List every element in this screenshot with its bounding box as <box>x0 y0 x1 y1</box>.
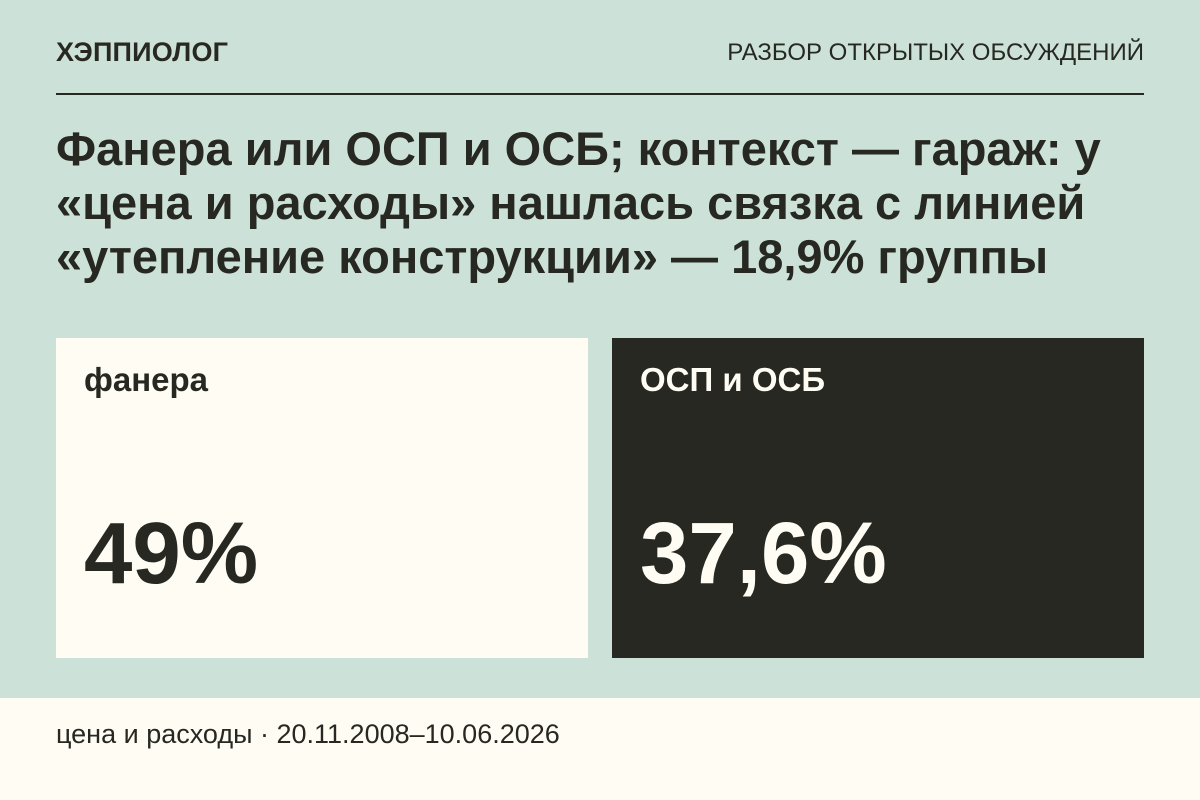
value: 37,6%: 37,6% <box>640 505 887 602</box>
title: Фанера или ОСП и ОСБ; контекст — гараж: у <box>56 122 1101 175</box>
panel label: фанера: фанера <box>84 361 208 398</box>
title <box>56 122 1101 283</box>
brand name: ХЭППИОЛОГ <box>56 37 228 67</box>
panel: ОСП и ОСБ <box>612 338 1144 658</box>
panel label: ОСП и ОСБ: ОСП и ОСБ <box>640 361 825 398</box>
header caption: РАЗБОР ОТКРЫТЫХ ОБСУЖДЕНИЙ <box>727 39 1144 66</box>
title: «утепление конструкции» — 18,9% группы <box>56 230 1048 283</box>
footer text: цена и расходы · 20.11.2008–10.06.2026 <box>56 719 560 749</box>
value: 49%: 49% <box>84 505 258 602</box>
panel: фанера <box>56 338 588 658</box>
footer band <box>0 698 1200 800</box>
title: «цена и расходы» нашлась связка с линией <box>56 176 1085 229</box>
